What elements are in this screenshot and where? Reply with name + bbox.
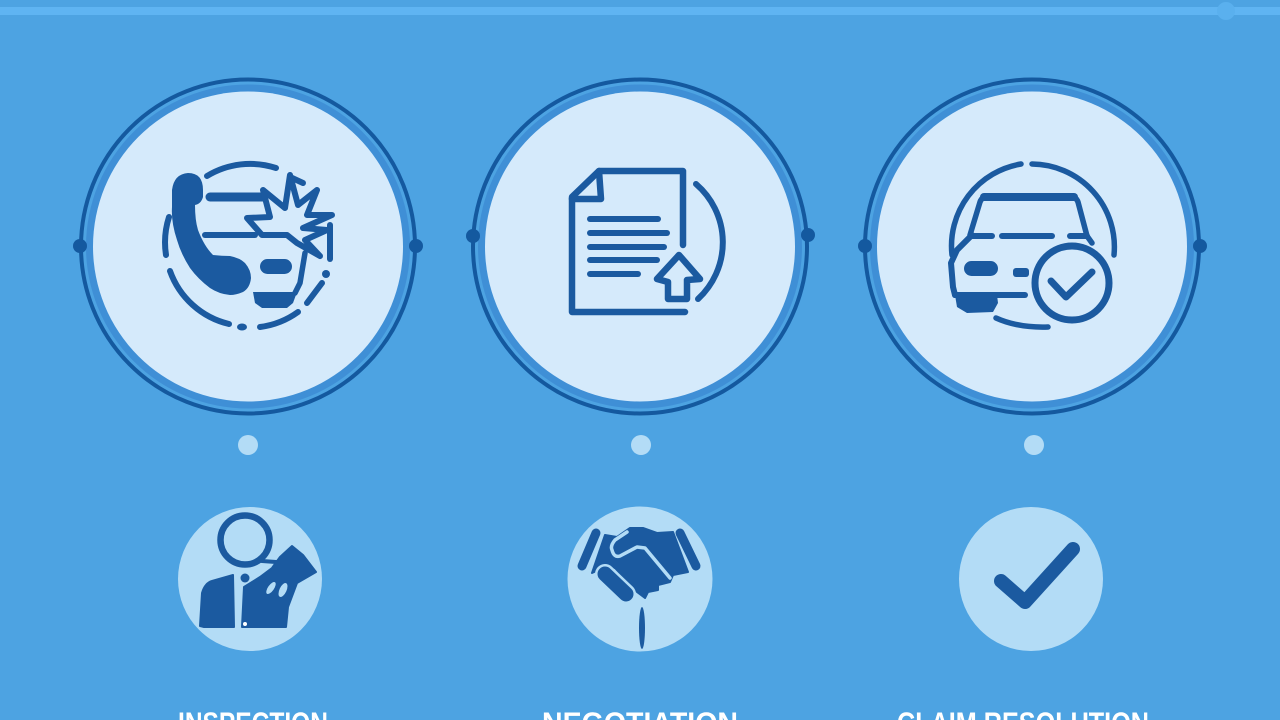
step: claim resolution — [897, 507, 1149, 720]
step: negotiation — [542, 506, 738, 720]
panel: claim documents — [466, 80, 815, 414]
icon: car with check badge — [951, 164, 1114, 327]
connector dot 3 — [1024, 435, 1044, 455]
panel: first notice of loss — [73, 80, 423, 414]
icon: check mark — [1001, 549, 1073, 602]
icon: phone call and car collision — [165, 164, 332, 330]
icon: inspector with magnifier — [200, 516, 316, 627]
top progress bar — [0, 2, 1280, 20]
icon: handshake — [582, 528, 696, 649]
step: inspection — [178, 507, 328, 720]
connector dot 1 — [238, 435, 258, 455]
icon: document with upload arrow — [572, 171, 723, 312]
connector dot 2 — [631, 435, 651, 455]
panel: car claim approved — [858, 80, 1207, 414]
